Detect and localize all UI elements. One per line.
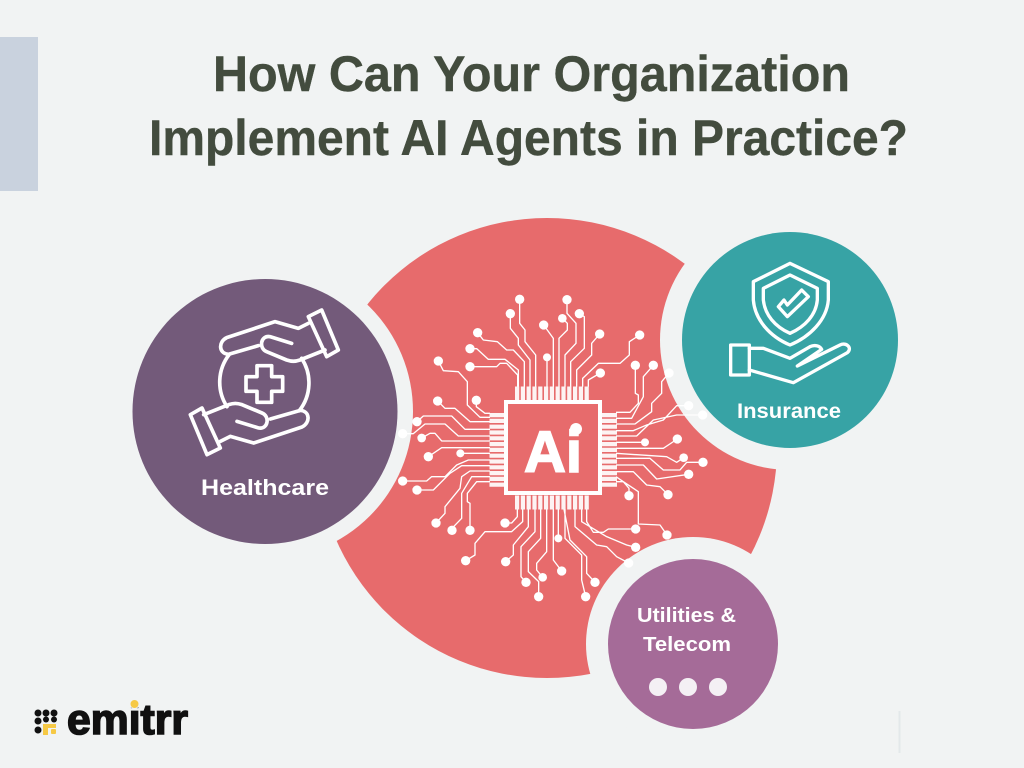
label: Utilities & Telecom: Telecom: [643, 634, 731, 656]
panel: utilities and telecom: [608, 559, 778, 729]
logo: emitrr: [34, 696, 188, 744]
title: How Can Your Organization: [213, 46, 850, 102]
label: Utilities & Telecom: Utilities &: [637, 605, 736, 627]
central red circle: [317, 218, 777, 678]
faint vertical mark: [898, 711, 900, 753]
icon: hands holding medical cross: [190, 310, 338, 455]
chip body: [506, 402, 600, 493]
three dots: [649, 678, 727, 696]
icon: shield over hand: [731, 263, 849, 383]
chip pins: [497, 394, 610, 502]
circuit traces: [403, 299, 703, 597]
wordmark: emitrr: [67, 696, 188, 744]
circuit nodes: [398, 295, 708, 601]
panel: healthcare: [132, 279, 398, 544]
panel: insurance: [682, 232, 898, 448]
label: Healthcare: Healthcare: [201, 475, 329, 500]
title: Implement AI Agents in Practice?: [149, 110, 908, 166]
label: Utilities & Telecom: [637, 605, 736, 656]
accent block: [0, 37, 38, 191]
logo mark: [34, 710, 58, 735]
title: [149, 46, 908, 166]
AI chip circuit: [398, 295, 708, 601]
label: Insurance: Insurance: [737, 400, 841, 423]
chip label: Ai: [524, 420, 582, 485]
